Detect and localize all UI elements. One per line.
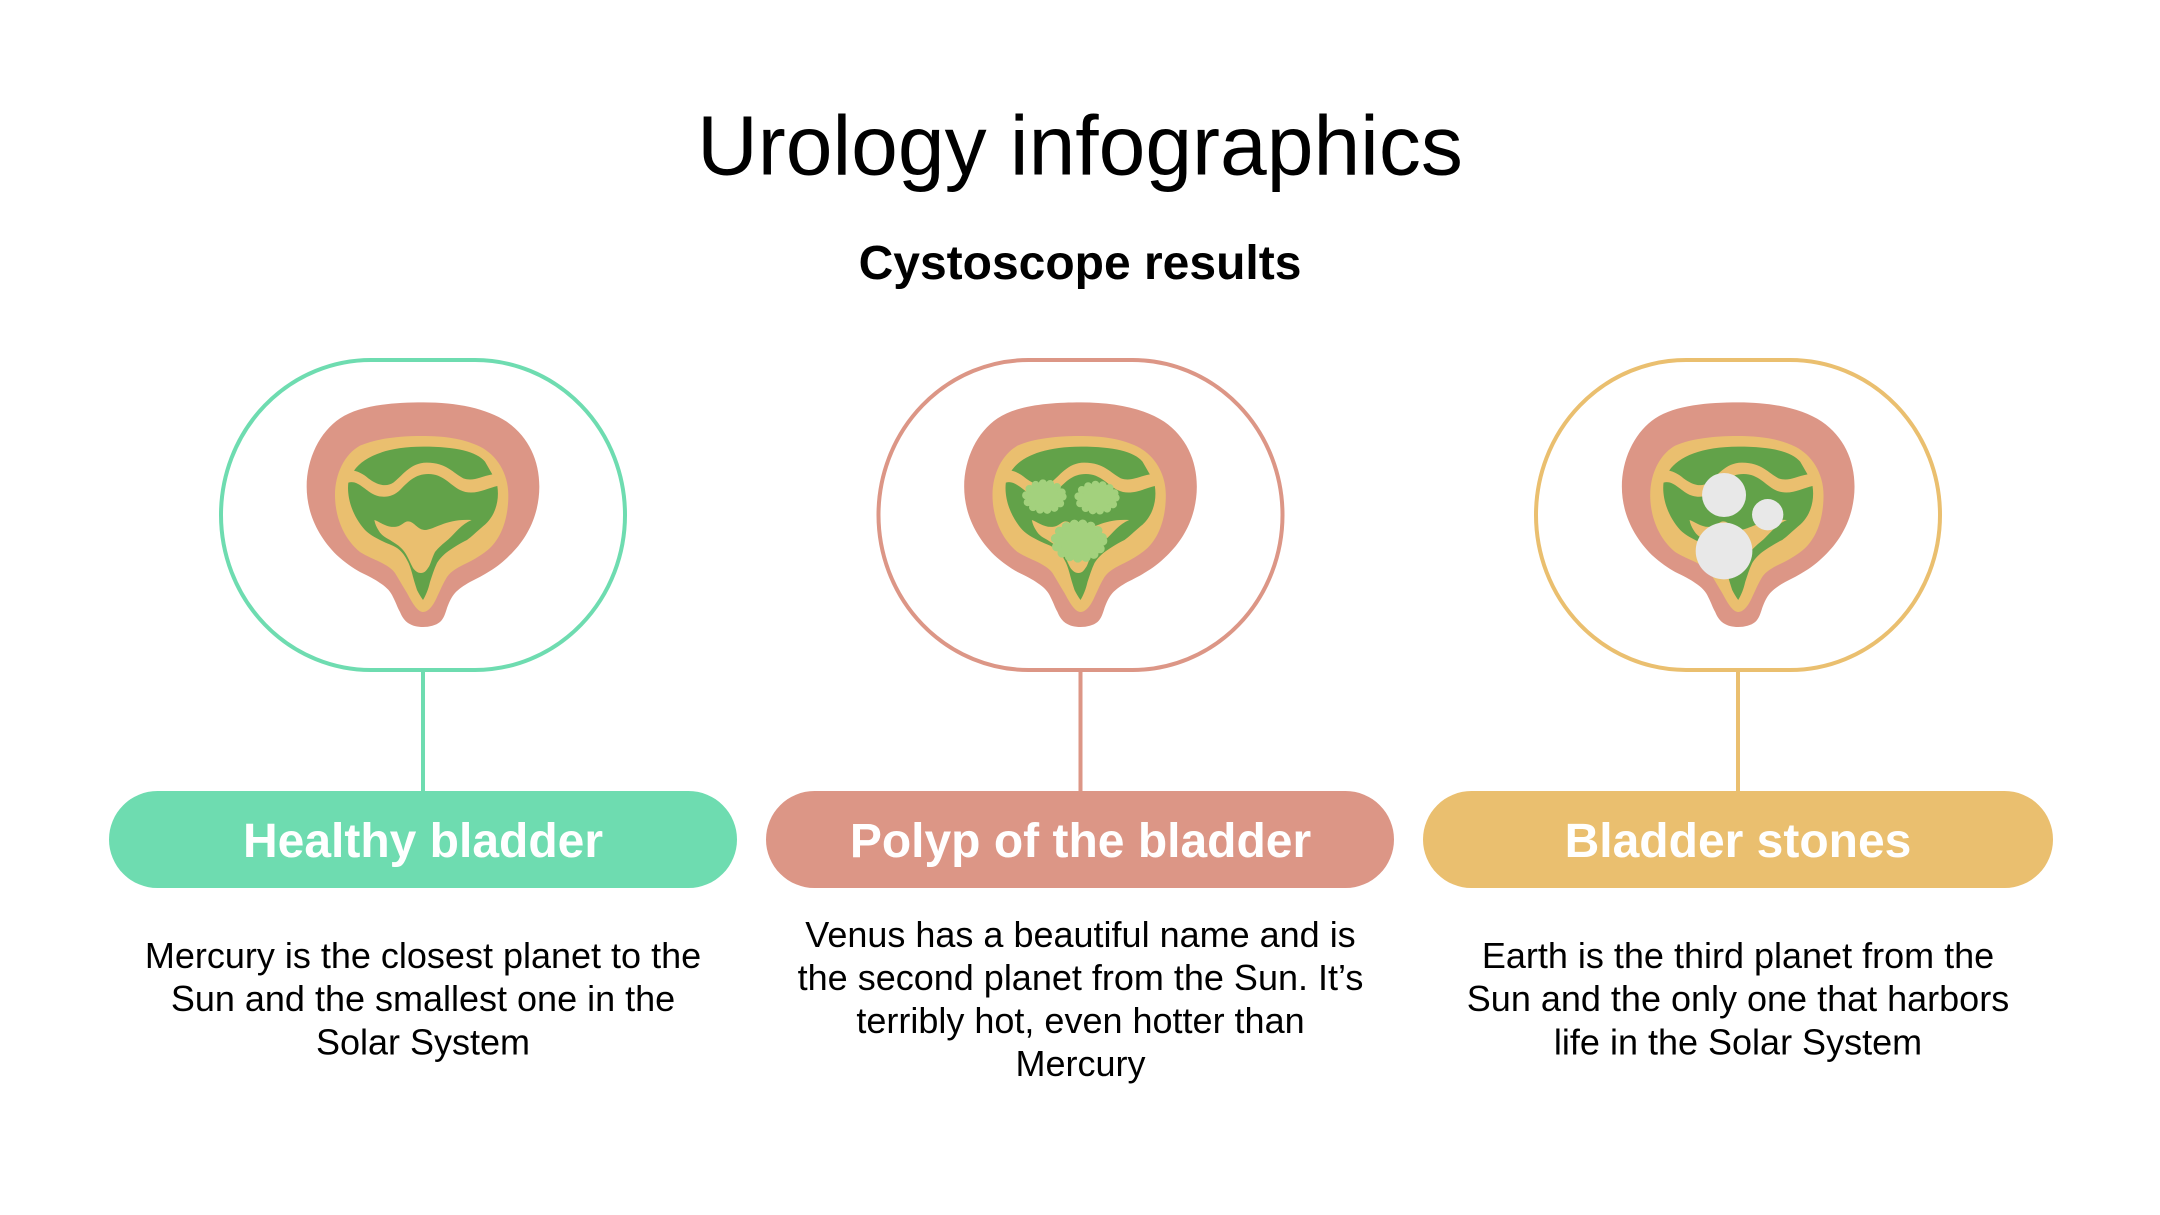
connector line bbox=[421, 670, 425, 791]
connector line bbox=[1736, 670, 1740, 791]
rounded outline frame bbox=[221, 360, 625, 670]
description: Solar System bbox=[316, 1022, 530, 1062]
connector line bbox=[1078, 670, 1082, 791]
icon: bladder with stones bbox=[1622, 402, 1855, 627]
label pill bbox=[109, 791, 737, 888]
stones bbox=[1696, 473, 1783, 579]
icon: bladder with polyps bbox=[964, 402, 1197, 627]
label pill: Bladder stones bbox=[1565, 815, 1911, 868]
label pill bbox=[766, 791, 1394, 888]
icon: healthy bladder bbox=[307, 402, 539, 627]
description: terribly hot, even hotter than bbox=[856, 1000, 1305, 1041]
description: the second planet from the Sun. It’s bbox=[798, 957, 1363, 998]
panel: healthy bladder bbox=[109, 360, 737, 1062]
title: Urology infographics bbox=[697, 98, 1463, 192]
label pill: Healthy bladder bbox=[243, 815, 603, 868]
description: Sun and the smallest one in the bbox=[171, 978, 675, 1019]
label pill: Polyp of the bladder bbox=[850, 815, 1311, 868]
description: Earth is the third planet from the bbox=[1482, 935, 1994, 976]
description: Venus has a beautiful name and is bbox=[805, 914, 1356, 955]
panel: polyp of the bladder bbox=[766, 360, 1394, 1084]
description: Sun and the only one that harbors bbox=[1467, 978, 2009, 1019]
panel: bladder stones bbox=[1423, 360, 2053, 1062]
polyps bbox=[1026, 483, 1116, 558]
description: Mercury bbox=[1015, 1043, 1146, 1084]
rounded outline frame bbox=[878, 360, 1282, 670]
label pill bbox=[1423, 791, 2053, 888]
description: life in the Solar System bbox=[1554, 1022, 1922, 1062]
description: Mercury is the closest planet to the bbox=[145, 935, 701, 976]
rounded outline frame bbox=[1536, 360, 1940, 670]
subtitle: Cystoscope results bbox=[859, 237, 1301, 290]
